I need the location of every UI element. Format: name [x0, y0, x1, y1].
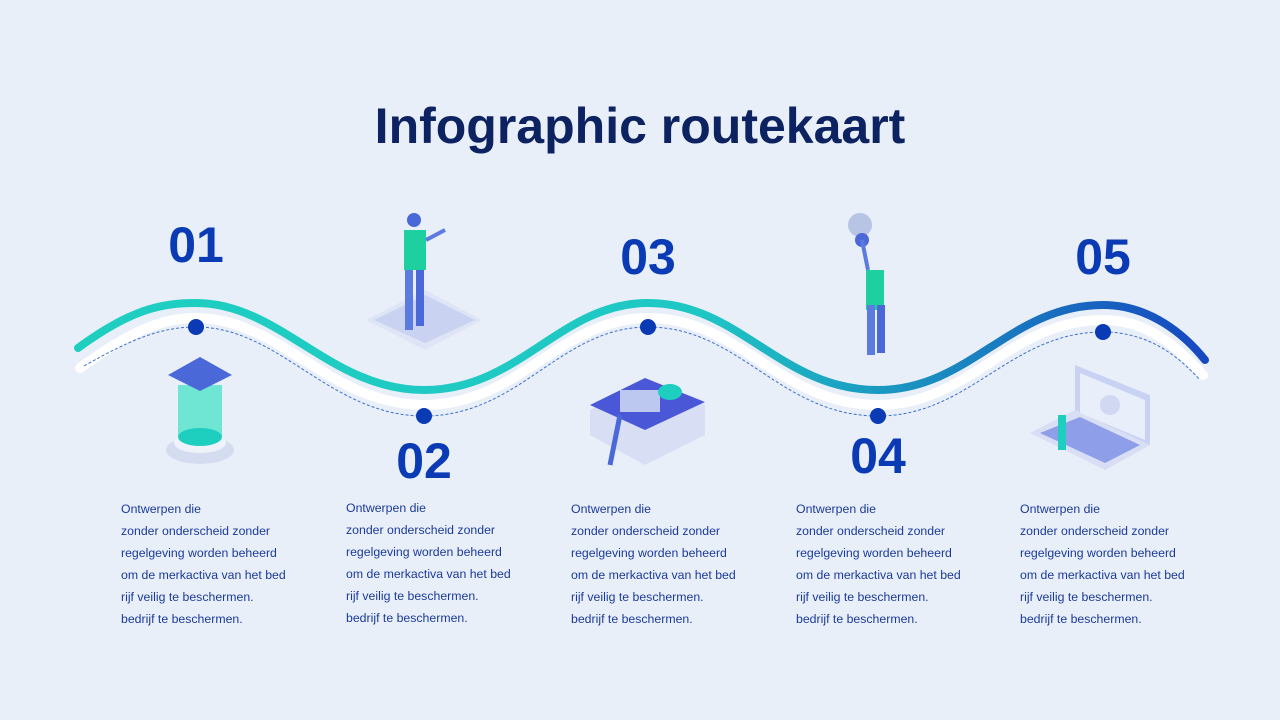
numbers: 01	[168, 217, 224, 273]
text block 3: bedrijf te beschermen.	[571, 612, 693, 626]
text block 1: Ontwerpen die	[121, 502, 201, 516]
text block 3: om de merkactiva van het bed	[571, 568, 736, 582]
text block 3: zonder onderscheid zonder	[571, 524, 720, 538]
text: 02	[396, 433, 452, 489]
text: 03	[620, 229, 676, 285]
icon: graduation cylinder	[166, 357, 234, 464]
text block 3: regelgeving worden beheerd	[571, 546, 727, 560]
text block 5: zonder onderscheid zonder	[1020, 524, 1169, 538]
icon: laptop	[1030, 365, 1150, 470]
text block 2: regelgeving worden beheerd	[346, 545, 502, 559]
text block 5: Ontwerpen die	[1020, 502, 1100, 516]
text block 1: bedrijf te beschermen.	[121, 612, 243, 626]
text block 3	[571, 502, 736, 626]
title: Infographic routekaart	[375, 98, 905, 154]
text block 1: regelgeving worden beheerd	[121, 546, 277, 560]
icon: person on platform	[367, 213, 482, 350]
text block 1	[121, 502, 286, 626]
text block 5	[1020, 502, 1185, 626]
text block 4: zonder onderscheid zonder	[796, 524, 945, 538]
icon: person with bulb	[848, 213, 885, 355]
text: 04	[850, 428, 906, 484]
text block 1: zonder onderscheid zonder	[121, 524, 270, 538]
text block 2: Ontwerpen die	[346, 501, 426, 515]
text block 2	[346, 501, 511, 625]
text block 3: rijf veilig te beschermen.	[571, 590, 704, 604]
text block 3: Ontwerpen die	[571, 502, 651, 516]
text block 1: om de merkactiva van het bed	[121, 568, 286, 582]
text block 1: rijf veilig te beschermen.	[121, 590, 254, 604]
text block 4: rijf veilig te beschermen.	[796, 590, 929, 604]
text block 5: bedrijf te beschermen.	[1020, 612, 1142, 626]
text block 5: om de merkactiva van het bed	[1020, 568, 1185, 582]
text block 2: bedrijf te beschermen.	[346, 611, 468, 625]
icon: person on cube	[590, 378, 705, 466]
text block 4: Ontwerpen die	[796, 502, 876, 516]
text block 5: regelgeving worden beheerd	[1020, 546, 1176, 560]
text: 05	[1075, 229, 1131, 285]
text block 2: om de merkactiva van het bed	[346, 567, 511, 581]
text block 5: rijf veilig te beschermen.	[1020, 590, 1153, 604]
text block 2: rijf veilig te beschermen.	[346, 589, 479, 603]
text block 4: bedrijf te beschermen.	[796, 612, 918, 626]
text block 4: regelgeving worden beheerd	[796, 546, 952, 560]
text block 4: om de merkactiva van het bed	[796, 568, 961, 582]
text block 2: zonder onderscheid zonder	[346, 523, 495, 537]
text block 4	[796, 502, 961, 626]
